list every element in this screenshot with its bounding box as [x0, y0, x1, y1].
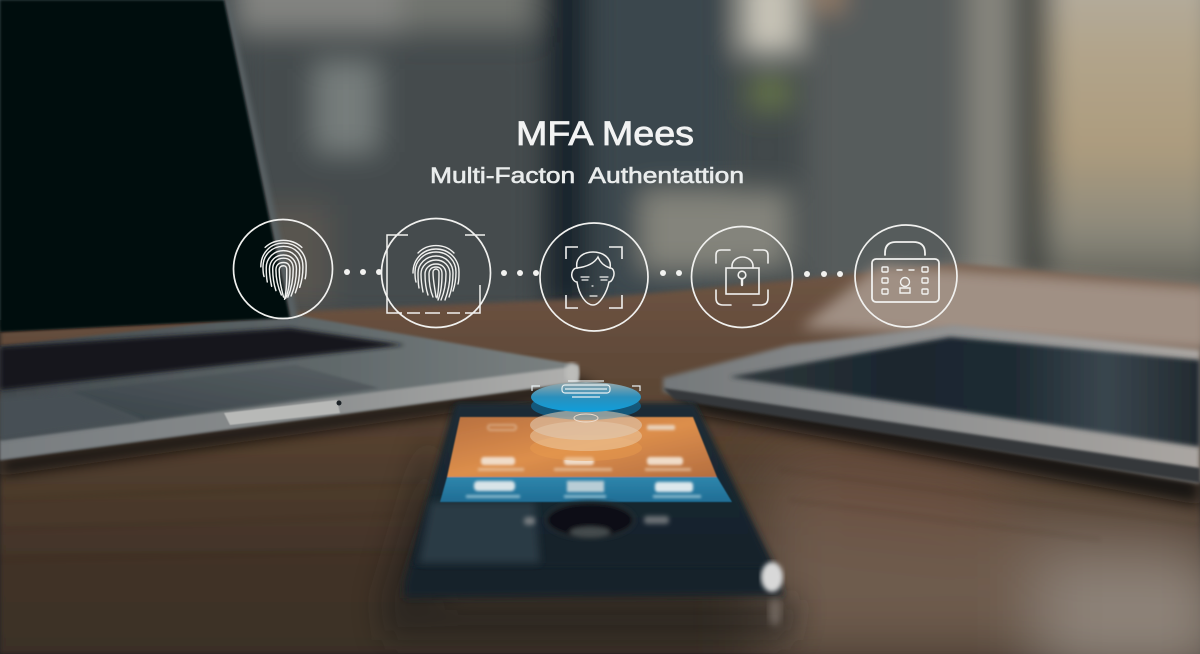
laptop trackpad	[70, 365, 379, 420]
icon: face scan in circle	[540, 223, 648, 331]
icon: fingerprint in circle	[234, 220, 332, 318]
laptop	[0, 0, 579, 460]
smartphone	[404, 404, 784, 626]
blurred window background	[0, 0, 1200, 320]
laptop screen	[222, 0, 298, 320]
laptop notch	[224, 400, 340, 425]
subtitle: Multi-Facton Authentattion	[430, 163, 744, 188]
phone lower left panel	[419, 502, 540, 563]
connector dots	[344, 269, 843, 277]
laptop base	[0, 314, 578, 460]
icon: keypad lock in circle	[855, 225, 957, 327]
icon: padlock scan in circle	[692, 226, 792, 328]
title: MFA Mees	[516, 115, 694, 153]
app icons	[466, 425, 701, 498]
tablet	[663, 325, 1200, 483]
laptop keyboard	[0, 328, 405, 390]
hologram lens	[530, 381, 642, 461]
phone screen	[440, 417, 732, 502]
wooden table	[0, 264, 1200, 654]
phone body	[404, 406, 784, 598]
phone home controls	[524, 502, 669, 538]
icon: scanned fingerprint in circle	[382, 218, 490, 328]
tablet screen	[729, 337, 1200, 447]
